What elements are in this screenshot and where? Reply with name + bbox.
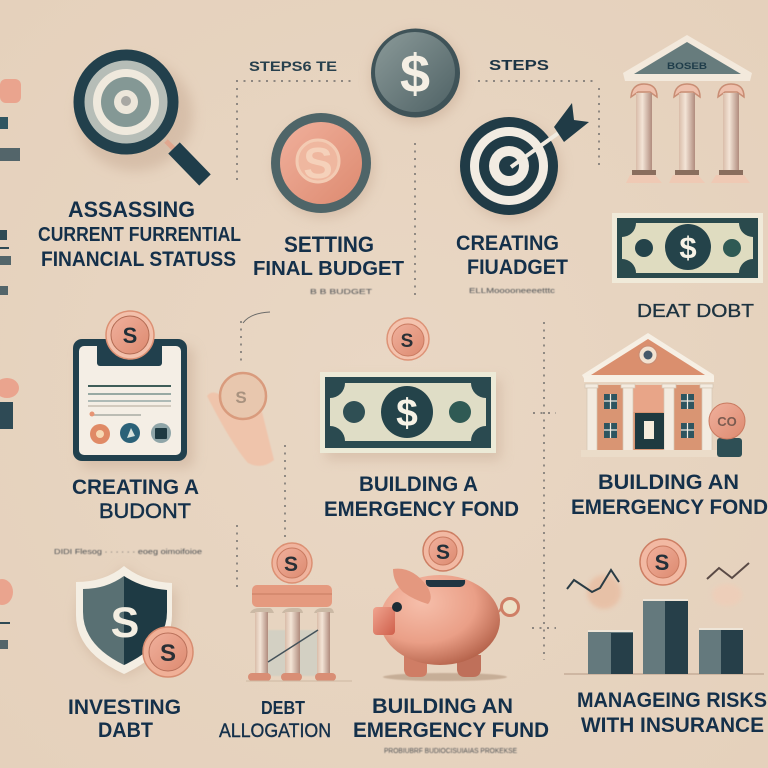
left edge fragments — [0, 79, 21, 649]
heading: creating budget: FIUADGET — [467, 256, 568, 279]
icon: clipboard coin — [106, 311, 154, 359]
label: steps right: STEPS — [489, 58, 549, 74]
icon: shield with coin: S — [111, 599, 139, 647]
heading: investing dabt — [68, 696, 181, 742]
icon: shield with coin — [76, 566, 193, 677]
heading: creating a budont: BUDONT — [99, 500, 191, 523]
heading: building emergency fund center — [324, 473, 519, 521]
icon: clipboard — [73, 339, 194, 468]
icon: columns with chart line: S — [284, 553, 298, 576]
small caption row: DIDI Flesog · · · · · · eoeg oimoifoioe — [54, 549, 202, 556]
heading: building emergency fund center: BUILDING A — [359, 473, 478, 496]
icon: banknote center: $ — [396, 392, 418, 435]
icon: banknote top right: $ — [679, 230, 697, 265]
icon: setting coin — [271, 113, 374, 218]
heading: building emergency fund bottom: EMERGENCY FUND — [353, 719, 549, 742]
heading: building emergency fund right — [571, 471, 768, 519]
icon: clipboard coin: S — [123, 323, 137, 348]
icon: central dollar coin: $ — [400, 44, 430, 104]
icon: target with arrow — [460, 103, 589, 220]
icon: setting coin: S — [303, 139, 333, 188]
icon: house bank: CO — [717, 414, 737, 429]
heading: setting budget: FINAL BUDGET — [253, 258, 404, 280]
heading: debt allocation: DEBT — [261, 698, 305, 718]
icon: central dollar coin — [371, 28, 463, 123]
heading: investing dabt: INVESTING — [68, 696, 181, 719]
icon: bar chart with coin — [564, 539, 764, 674]
heading: creating budget: CREATING — [456, 232, 559, 255]
icon: banknote top right — [612, 213, 763, 283]
heading: managing risks — [577, 689, 767, 737]
heading: managing risks: WITH INSURANCE — [581, 714, 764, 737]
icon: hand holding coin — [207, 373, 274, 466]
heading: assessing status — [38, 197, 241, 271]
icon: magnifying glass — [77, 55, 205, 180]
heading: building emergency fund right: BUILDING AN — [598, 471, 739, 494]
icon: banknote center — [320, 372, 501, 460]
heading: building emergency fund center: EMERGENCY FOND — [324, 498, 519, 521]
label: steps left: STEPS6 TE — [249, 58, 337, 74]
icon: hand holding coin: S — [235, 388, 247, 407]
heading: assessing status: FINANCIAL STATUSS — [41, 248, 236, 271]
heading: creating a budont — [72, 476, 199, 523]
heading: building emergency fund right: EMERGENCY FOND — [571, 496, 768, 519]
icon: house bank — [581, 333, 745, 457]
heading: setting budget: SETTING — [284, 232, 374, 257]
icon: shield with coin: S — [160, 640, 176, 667]
heading: building emergency fund bottom: BUILDING AN — [372, 695, 513, 718]
heading: debt allocation — [219, 698, 331, 742]
icon: bank with columns — [623, 35, 752, 183]
icon: columns with chart line — [246, 543, 352, 681]
curved connector — [243, 312, 270, 323]
small caption: PROBIUBRF BUDIOCISUIAIAS PROKEKSE — [384, 748, 517, 755]
heading: assessing status: CURRENT FURRENTIAL — [38, 224, 241, 246]
small caption: B B BUDGET — [310, 289, 373, 296]
heading: debt allocation: ALLOGATION — [219, 721, 331, 742]
icon: banknote coin — [387, 318, 429, 360]
heading: creating budget — [456, 232, 568, 279]
icon: bar chart with coin: S — [655, 550, 669, 575]
heading: deat dobt: DEAT DOBT — [637, 301, 754, 321]
heading: creating a budont: CREATING A — [72, 476, 199, 499]
small caption: ELLMooooneeeetttc — [469, 288, 556, 295]
dotted connector lines — [236, 81, 599, 660]
icon: piggy bank — [373, 531, 518, 681]
heading: investing dabt: DABT — [98, 719, 153, 742]
heading: building emergency fund bottom — [353, 695, 549, 742]
icon: piggy bank: S — [436, 541, 450, 564]
heading: setting budget — [253, 232, 404, 280]
heading: assessing status: ASSASSING — [68, 197, 195, 222]
icon: banknote coin: S — [401, 331, 413, 352]
icon: bank with columns: BOSEB — [667, 61, 708, 71]
